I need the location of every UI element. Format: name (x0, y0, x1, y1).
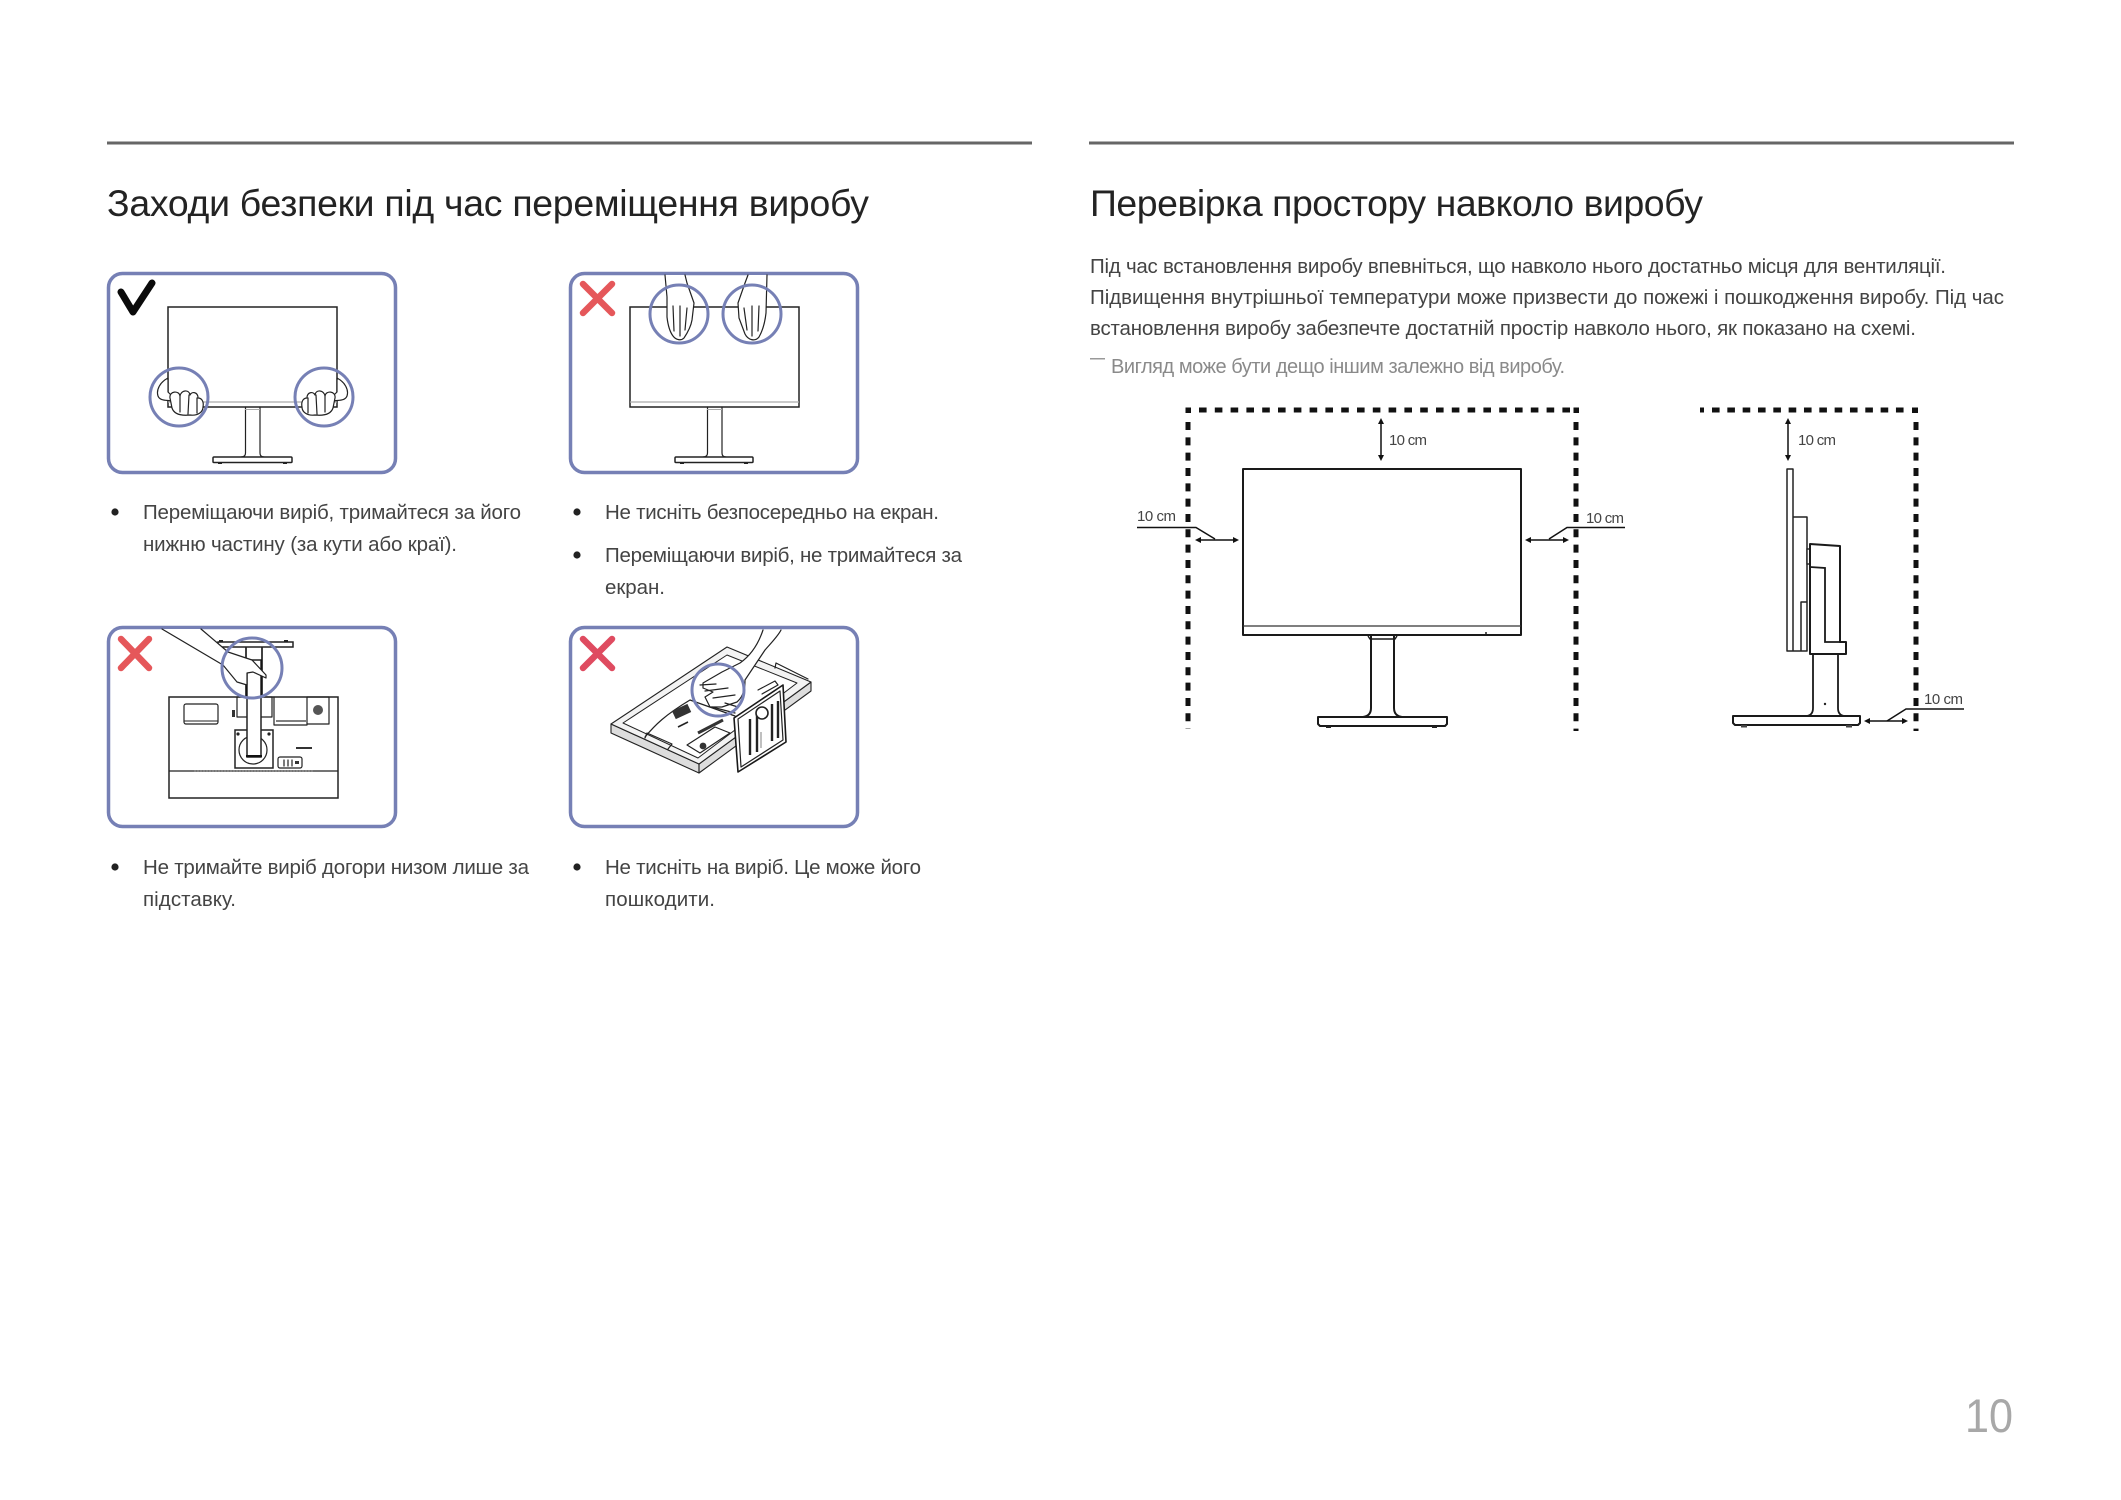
bullet text: do not press or hold screen (573, 501, 963, 599)
bullet text: do not hold by stand: Не тримайте виріб догори низом лише за (143, 856, 530, 879)
bullet text: hold lower part: нижню частину (за кути або краї). (143, 533, 457, 556)
arrow: top gap (1785, 418, 1791, 461)
label: right 10 cm: 10 cm (1586, 510, 1624, 527)
bullet text: hold lower part (111, 501, 521, 556)
icon: hand pressing (700, 630, 781, 713)
paragraph: ventilation: Підвищення внутрішньої температури може призвести до пожежі і пошкодження виробу. Під час (1090, 286, 2004, 309)
bullet text: do not hold by stand: підставку. (143, 888, 236, 911)
bullet text: hold lower part: Переміщаючи виріб, тримайтеся за його (143, 501, 521, 524)
monitor front (630, 307, 799, 464)
diagram: front clearance (1137, 408, 1625, 731)
bullet text: do not press or hold screen: Не тисніть безпосередньо на екран. (605, 501, 939, 524)
leader and arrow: right gap (1525, 528, 1625, 543)
icon: hand gripping stand (162, 629, 266, 685)
label: left 10 cm: 10 cm (1137, 508, 1176, 525)
icon: red cross (583, 284, 612, 313)
bullet text: do not hold by stand (111, 856, 530, 911)
paragraph: ventilation: Під час встановлення виробу впевніться, що навколо нього достатньо місця для вентиляції. (1090, 255, 1946, 278)
icon: right hand on screen (738, 275, 767, 340)
dashed boundary (1700, 408, 1918, 731)
label: rear 10 cm: 10 cm (1924, 691, 1963, 708)
stand (218, 640, 293, 757)
panel: do not press the product (570, 628, 858, 826)
label: top 10 cm: 10 cm (1798, 432, 1836, 449)
bullet text: do not press product (573, 856, 921, 911)
monitor back upside down (169, 697, 338, 798)
icon: left hand on screen (665, 275, 694, 340)
icon: right hand (302, 378, 348, 415)
note: Вигляд може бути дещо іншим залежно від виробу. (1111, 356, 1565, 378)
monitor front (1243, 469, 1521, 728)
panel: do not press the screen (570, 274, 858, 472)
heading: moving safety: Заходи безпеки під час переміщення виробу (107, 182, 869, 224)
icon: red cross (583, 639, 612, 668)
panel: correct holding by lower corners (108, 274, 396, 472)
paragraph: ventilation (1090, 255, 2004, 340)
page number: 10 (1965, 1389, 2013, 1442)
bullet text: do not press product: Не тисніть на виріб. Це може його (605, 856, 921, 879)
paragraph: ventilation: встановлення виробу забезпечте достатній простір навколо нього, як показано на схемі. (1090, 317, 1916, 340)
monitor side (1733, 469, 1860, 728)
dashed boundary (1186, 408, 1579, 731)
bullet text: do not press or hold screen: екран. (605, 576, 665, 599)
bullet text: do not press or hold screen: Переміщаючи виріб, не тримайтеся за (605, 544, 963, 567)
highlight circles (650, 285, 781, 343)
icon: red cross (121, 639, 149, 668)
monitor front (168, 307, 337, 464)
arrow: top gap (1378, 418, 1384, 461)
highlight circle (222, 638, 282, 698)
highlight circle (692, 664, 744, 716)
diagram: side clearance (1700, 408, 1964, 731)
leader and arrow: left gap (1137, 528, 1239, 543)
heading: space around product: Перевірка простору навколо виробу (1090, 182, 1703, 224)
leader and arrow: rear gap (1864, 709, 1964, 724)
monitor lying in packaging (611, 647, 811, 773)
stand plate (734, 685, 786, 772)
icon: check mark (121, 283, 152, 312)
label: top 10 cm: 10 cm (1389, 432, 1427, 449)
highlight circles (150, 368, 353, 426)
panel: do not hold upside down by stand (108, 628, 396, 826)
icon: left hand (157, 378, 203, 415)
bullet text: do not press product: пошкодити. (605, 888, 715, 911)
